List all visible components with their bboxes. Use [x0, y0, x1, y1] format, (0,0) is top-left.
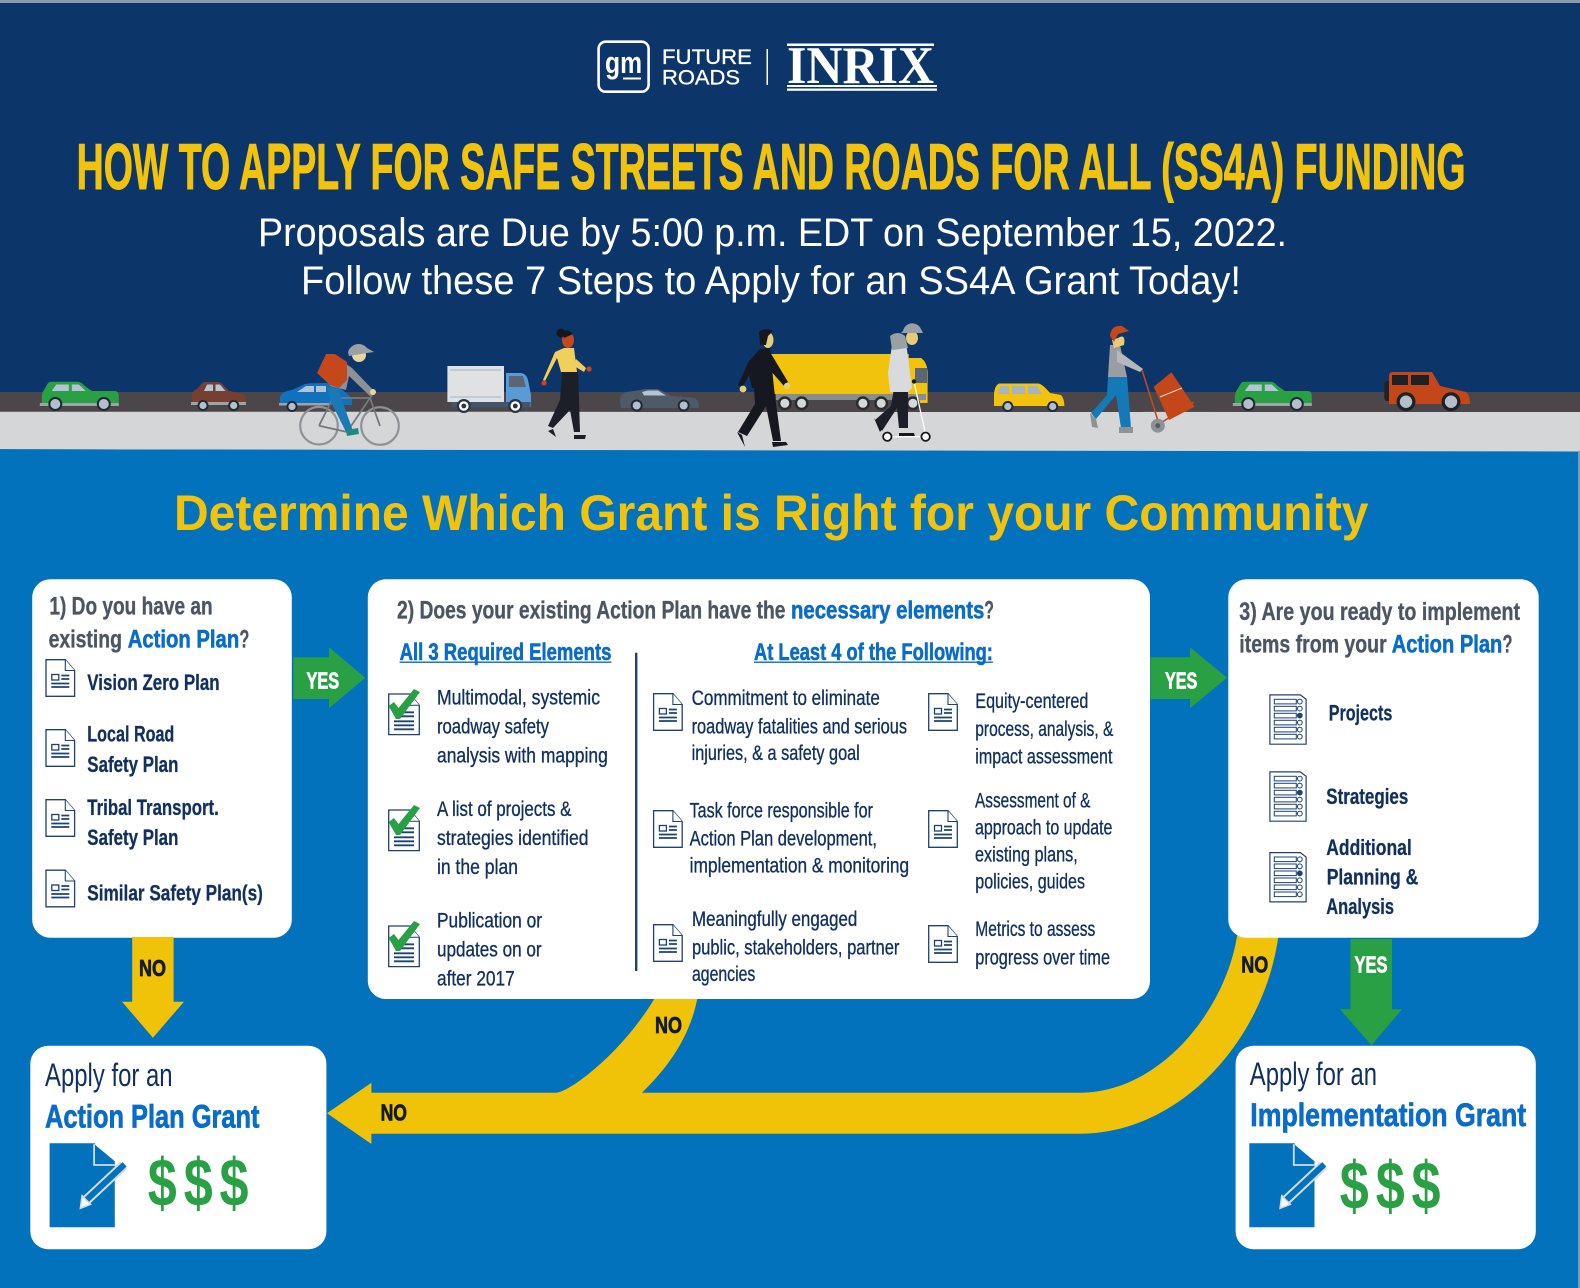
- item: Strategies: Strategies: [1326, 784, 1408, 809]
- question 3: items from your: [1239, 631, 1387, 659]
- arrow: YES from step 3 to Implementation Grant: [1340, 939, 1402, 1045]
- item: Tribal Transport. Safety Plan: [87, 795, 219, 850]
- icon: checklist: [1270, 695, 1306, 744]
- required element 3: after 2017: [437, 968, 515, 991]
- icon: GM logo: [599, 42, 649, 92]
- icon: checked document: [389, 805, 420, 851]
- item: Similar Safety Plans: Similar Safety Plan(s): [87, 881, 263, 906]
- panel 2: necessary elements: [368, 579, 1150, 999]
- element: assessment: policies, guides: [975, 870, 1085, 893]
- icon: document: [654, 925, 682, 961]
- sidewalk: [0, 412, 1580, 452]
- required element 1: analysis with mapping: [437, 744, 608, 767]
- panel: Implementation Grant: [1236, 1046, 1536, 1249]
- question 2: ?: [984, 597, 994, 625]
- item: Additional Planning and Analysis: [1326, 835, 1418, 919]
- item: Local Road Safety Plan: Local Road: [87, 722, 174, 747]
- element: metrics: progress over time: [975, 946, 1110, 969]
- label: NO on step 2 curve: NO: [655, 1012, 682, 1038]
- icon: checked document: [389, 689, 420, 735]
- element: equity: [975, 690, 1113, 768]
- icon: document: [929, 926, 957, 962]
- dollar signs: $: [184, 1145, 213, 1221]
- text: apply for action plan grant: Apply for an: [45, 1057, 173, 1093]
- element: equity: Equity-centered: [975, 690, 1088, 713]
- panel 3: ready to implement: [1228, 579, 1539, 938]
- item: Local Road Safety Plan: [87, 722, 178, 777]
- icon: document and pen: [50, 1143, 125, 1227]
- street illustration: [40, 323, 1470, 447]
- item: Additional Planning and Analysis: Planning &: [1327, 864, 1418, 889]
- element: engagement: public, stakeholders, partner: [692, 936, 899, 959]
- required element 3: Publication or: [437, 910, 542, 933]
- icon: green car: [40, 382, 119, 411]
- icon: grey sports car: [620, 389, 699, 412]
- icon: cyclist: [300, 344, 399, 445]
- element: task force: Action Plan development,: [690, 827, 877, 850]
- element: task force: Task force responsible for: [690, 799, 873, 822]
- icon: delivery worker with dolly: [1090, 326, 1194, 433]
- element: equity: process, analysis, &: [975, 718, 1113, 741]
- element: commitment: Commitment to eliminate: [692, 687, 880, 710]
- question 3: Action Plan: [1392, 631, 1502, 659]
- element: commitment: injuries, & a safety goal: [692, 742, 860, 765]
- arrow: NO from step 1 to Action Plan Grant: [122, 937, 184, 1038]
- item: Tribal Transport. Safety Plan: Tribal Transport.: [87, 795, 219, 820]
- required element 1: roadway safety: [437, 715, 549, 738]
- required element 1: [437, 686, 608, 767]
- arrow: YES from step 2 to step 3: [1150, 647, 1227, 708]
- INRIX logo: INRIX: [787, 37, 934, 95]
- question 2: necessary elements: [791, 597, 984, 625]
- arrow: YES from step 1 to step 2: [294, 647, 365, 708]
- question 2: 2) Does your existing Action Plan have the: [397, 597, 786, 625]
- element: assessment: existing plans,: [975, 843, 1078, 866]
- Future Roads wordmark: [662, 46, 752, 90]
- item: Vision Zero Plan: Vision Zero Plan: [87, 670, 220, 695]
- dollar signs: $: [1340, 1148, 1369, 1224]
- required element 3: [437, 910, 542, 991]
- icon: document: [654, 811, 682, 847]
- required element 2: strategies identified: [437, 827, 589, 850]
- required element 2: in the plan: [437, 856, 518, 879]
- icon: brown car: [191, 382, 246, 411]
- question 1: existing: [49, 625, 122, 653]
- Future Roads wordmark: ROADS: [662, 67, 740, 90]
- icon: document: [46, 800, 75, 836]
- icon: document: [46, 660, 75, 696]
- question 1: ?: [239, 625, 249, 653]
- element: commitment: roadway fatalities and serious: [692, 715, 907, 738]
- label: NO on step 3 curve: NO: [1241, 952, 1268, 978]
- element: metrics: Metrics to assess: [975, 918, 1095, 941]
- item: Local Road Safety Plan: Safety Plan: [87, 752, 178, 777]
- required element 1: Multimodal, systemic: [437, 686, 600, 709]
- dollar signs: $: [1412, 1148, 1440, 1224]
- text: apply for action plan grant: [45, 1057, 260, 1135]
- arrow: yellow NO path from steps 2 and 3 to Action Plan Grant: [327, 934, 1279, 1144]
- label: NO on arrow head: NO: [381, 1100, 407, 1126]
- required element 3: updates on or: [437, 939, 542, 962]
- item: Tribal Transport. Safety Plan: Safety Plan: [87, 825, 178, 850]
- element: commitment: [692, 687, 907, 765]
- item: Projects: Projects: [1329, 701, 1392, 726]
- required element 2: [437, 798, 589, 879]
- arrow: YES from step 2 to step 3: YES: [1165, 667, 1197, 693]
- item: Additional Planning and Analysis: Additional: [1326, 835, 1412, 860]
- icon: document: [654, 694, 682, 730]
- icon: document: [929, 694, 957, 730]
- question 1: Action Plan: [128, 625, 239, 653]
- icon: man in black suit: [737, 329, 790, 447]
- icon: checklist: [1270, 772, 1306, 821]
- panel: Action Plan Grant: [30, 1046, 326, 1249]
- icon: checked document: [389, 921, 420, 967]
- subtitle: Follow these 7 Steps to Apply for an SS4A Grant Today!: [301, 259, 1241, 303]
- heading: at least 4 of the following: At Least 4 of the Following:: [754, 639, 993, 666]
- question 1: [49, 592, 249, 653]
- dollar signs: $: [1376, 1148, 1405, 1224]
- icon: green car: [1233, 382, 1312, 411]
- icon: blue car: [279, 383, 352, 412]
- section heading: Determine Which Grant is Right for your Community: [174, 485, 1369, 541]
- arrow: YES from step 3 to Implementation Grant: YES: [1354, 951, 1388, 977]
- element: assessment: approach to update: [975, 816, 1112, 839]
- icon: yellow semi truck: [756, 354, 928, 410]
- icon: document and pen: [1249, 1143, 1324, 1227]
- element: engagement: [692, 908, 899, 986]
- main blue background: [0, 449, 1580, 1288]
- question 1: 1) Do you have an: [49, 592, 213, 620]
- element: equity: impact assessment: [975, 745, 1113, 768]
- header background: [0, 0, 1580, 450]
- icon: GM logo: gm: [605, 45, 642, 80]
- element: task force: implementation & monitoring: [690, 855, 909, 878]
- text: apply for implementation grant: Apply for an: [1250, 1056, 1377, 1092]
- logos: [599, 37, 937, 95]
- element: assessment: [975, 789, 1112, 893]
- Future Roads wordmark: FUTURE: [662, 46, 752, 69]
- panel 1: existing action plan: [32, 579, 292, 938]
- icon: person on scooter: [874, 323, 930, 441]
- dollar signs: [148, 1145, 248, 1221]
- element: engagement: Meaningfully engaged: [692, 908, 857, 931]
- heading: all 3 required elements: All 3 Required Elements: [400, 639, 611, 666]
- question 3: ?: [1502, 631, 1512, 659]
- dollar signs: $: [220, 1145, 248, 1221]
- element: assessment: Assessment of &: [975, 789, 1090, 812]
- element: task force: [690, 799, 909, 878]
- arrow: YES from step 1 to step 2: YES: [306, 667, 339, 693]
- road: [0, 392, 1580, 412]
- icon: checklist: [1270, 853, 1306, 902]
- question 3: [1239, 598, 1521, 659]
- element: metrics: [975, 918, 1110, 969]
- element: engagement: agencies: [692, 963, 755, 986]
- subtitle: Proposals are Due by 5:00 p.m. EDT on September 15, 2022.: [258, 211, 1287, 255]
- icon: woman walking: [541, 328, 592, 439]
- icon: document: [46, 870, 75, 907]
- icon: red SUV: [1384, 372, 1470, 411]
- subtitle: [258, 211, 1287, 303]
- arrow: NO from step 1 to Action Plan Grant: NO: [139, 955, 166, 981]
- icon: yellow minivan: [994, 384, 1064, 412]
- icon: document: [46, 730, 75, 766]
- item: Additional Planning and Analysis: Analysis: [1326, 894, 1394, 919]
- icon: document: [929, 811, 957, 847]
- text: apply for implementation grant: [1250, 1056, 1526, 1133]
- required element 2: A list of projects &: [437, 798, 571, 821]
- text: apply for implementation grant: Implementation Grant: [1250, 1097, 1526, 1133]
- icon: delivery truck: [447, 366, 531, 413]
- dollar signs: $: [148, 1145, 177, 1221]
- dollar signs: [1340, 1148, 1440, 1224]
- text: apply for action plan grant: Action Plan Grant: [45, 1099, 260, 1135]
